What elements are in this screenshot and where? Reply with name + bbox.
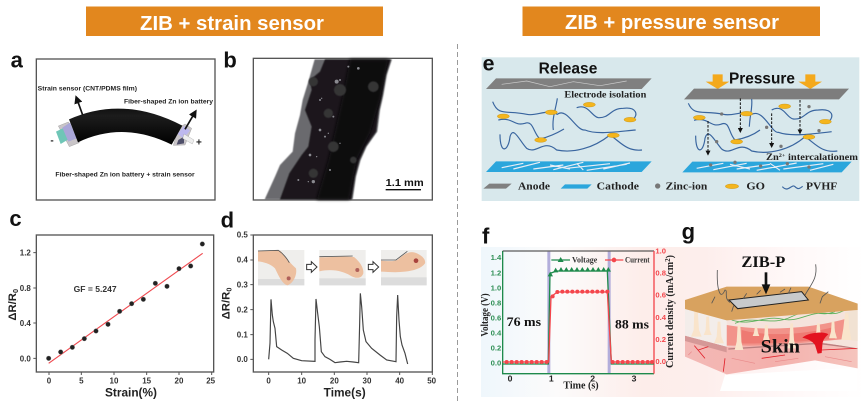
right ticks: 0.0 [655, 357, 666, 366]
sensor patch [729, 292, 808, 309]
label: 76 ms: 76 ms [507, 314, 541, 329]
panel b: fiber micrograph: b [223, 48, 237, 73]
axes [503, 251, 654, 374]
data points [46, 242, 205, 361]
tick labels: 1.2 [20, 249, 31, 258]
blood vessel [802, 333, 828, 354]
y axis title: ΔR/R [220, 292, 232, 319]
left ticks: 1.0 [491, 284, 501, 293]
tick labels: 50 [427, 377, 437, 386]
panel g: skin illustration [682, 219, 858, 391]
label: Zn intercalation: intercalationem [785, 152, 859, 162]
lower skin layer [685, 336, 858, 374]
left ticks: 0.4 [491, 329, 502, 338]
x ticks: 1 [549, 374, 554, 384]
legend: Anode [518, 181, 551, 192]
tick labels [20, 249, 216, 386]
left ticks: 1.4 [491, 253, 502, 262]
tick labels: 0 [47, 377, 52, 386]
label: pressure: Pressure [729, 71, 795, 88]
label: strain sensor: Strain sensor (CNT/PDMS film) [38, 86, 137, 93]
label: Zn intercalation: 2+ [779, 153, 785, 159]
tick labels: 0.2 [237, 305, 248, 314]
tick labels: 0.1 [237, 330, 248, 339]
label: electrode isolation: Electrode isolation [564, 89, 646, 99]
response curve [269, 293, 408, 364]
legend: Current [625, 256, 650, 265]
label: plus: + [196, 137, 202, 148]
tick labels: 0 [266, 377, 271, 386]
label: Skin: Skin [761, 337, 800, 358]
legend [551, 256, 650, 265]
arrow: to battery [185, 112, 195, 129]
label: Zn intercalation: Zn [766, 152, 777, 162]
ion path arrows [708, 98, 800, 154]
photo: fiber [265, 59, 392, 199]
x ticks: 0 [508, 374, 513, 384]
legend: PVHF [806, 181, 837, 192]
x axis title: time: Time (s) [563, 381, 599, 392]
panel a: strain sensor schematic: a [11, 48, 24, 73]
tick labels: 0.8 [20, 284, 31, 293]
polymer chains: release [493, 98, 642, 151]
x axis title: Time(s) [324, 387, 366, 400]
right ticks [655, 246, 667, 366]
anode: pressure [684, 89, 849, 99]
right ticks: 0.4 [655, 313, 667, 322]
tick labels: 20 [330, 377, 339, 386]
wires and hairs [712, 264, 828, 312]
tick labels [237, 231, 437, 386]
left ticks [491, 253, 502, 367]
voltage trace [503, 267, 654, 364]
tick labels: 0.4 [20, 319, 31, 328]
left ticks: 0.8 [491, 299, 502, 308]
right ticks: 0.6 [655, 291, 666, 300]
panel f: voltage and current chart [480, 224, 667, 392]
arrow: step one [307, 262, 317, 272]
white cut-out base [720, 368, 857, 391]
x ticks: 3 [632, 374, 637, 384]
right ticks: 0.8 [655, 268, 667, 277]
axis ticks [250, 235, 432, 375]
middle fat layer [685, 309, 858, 350]
tick labels: 15 [142, 377, 152, 386]
panel c: strain scatter chart: c [9, 206, 22, 231]
right ticks: 0.2 [655, 335, 666, 344]
icon: fiber battery and sensor tube [56, 109, 194, 147]
y axis title: current density: ) [665, 255, 676, 258]
label: ZIB-P: ZIB-P [741, 254, 786, 271]
left ticks: 0.2 [491, 344, 501, 353]
panel d: wrist bending response chart [220, 208, 437, 400]
switching bands [547, 252, 611, 373]
panel g: skin illustration: g [682, 219, 695, 244]
left ticks: 1.2 [491, 268, 501, 277]
x ticks [508, 374, 637, 384]
tick labels: 0.5 [237, 231, 248, 240]
tick labels: 10 [110, 377, 119, 386]
polymer chains: pressure [688, 99, 837, 152]
label: 88 ms: 88 ms [615, 316, 649, 331]
left ticks: 0.0 [491, 358, 501, 367]
tick labels: 0.3 [237, 280, 248, 289]
heading: ZIB + pressure sensor: ZIB + pressure sensor [565, 11, 779, 34]
zinc ions [715, 105, 821, 148]
label: battery: Fiber-shaped Zn ion battery [124, 99, 213, 106]
y axis title: current density: 2 [664, 258, 672, 262]
arrow: to strain sensor [77, 98, 83, 115]
panel b: fiber micrograph [223, 48, 432, 200]
right ticks: 1.0 [655, 246, 666, 255]
tick labels: 5 [79, 377, 84, 386]
legend: Zinc-ion [666, 181, 708, 192]
tick labels: 0.4 [237, 256, 248, 265]
axis ticks [33, 253, 212, 375]
panel c: strain scatter chart [7, 206, 216, 400]
tick labels: 0.0 [20, 354, 31, 363]
tick labels: 40 [395, 377, 405, 386]
arrow: to patch [762, 272, 770, 294]
panel e: release and pressure mechanism: e [483, 51, 495, 75]
anode: release [486, 78, 652, 89]
y axis title: current density: Current density (mA/cm [665, 258, 676, 368]
x axis title: Strain(%) [105, 387, 157, 400]
tick labels: 25 [206, 377, 216, 386]
x ticks: 2 [590, 374, 595, 384]
label: release: Release [539, 61, 597, 78]
tick labels: 0.0 [237, 355, 248, 364]
photo: wrist level [319, 250, 366, 285]
y axis title: 0 [11, 289, 20, 293]
current trace [503, 290, 654, 364]
tick labels: 10 [297, 377, 307, 386]
legend: GO [746, 181, 765, 192]
label: minus: - [50, 136, 54, 147]
scale bar: 1.1 mm: 1.1 mm [386, 178, 424, 189]
pressure arrows [706, 74, 822, 89]
panel a: strain sensor schematic [11, 48, 215, 200]
label: gauge factor: GF = 5.247 [74, 284, 117, 294]
caption: Fiber-shaped Zn ion battery + strain sensor [55, 172, 195, 179]
tick labels: 20 [175, 377, 184, 386]
heading: ZIB + strain sensor: ZIB + strain sensor [140, 12, 324, 35]
panel d: wrist bending response chart: d [221, 208, 234, 233]
panel e: release and pressure mechanism [482, 51, 859, 201]
legend: Voltage [572, 256, 598, 265]
panel f: voltage and current chart: f [482, 224, 490, 249]
tick labels: 30 [363, 377, 372, 386]
GO flakes: pressure [693, 104, 831, 144]
arrow: step two [368, 262, 379, 272]
legend: Cathode [597, 181, 640, 192]
green nerve network [732, 309, 848, 323]
photo: wrist bent up [381, 250, 427, 285]
y axis title: 0 [224, 288, 233, 292]
background band for f and g [481, 247, 865, 397]
heading: ZIB + strain sensor [86, 6, 383, 36]
cathode: release [486, 161, 652, 172]
legend [483, 181, 837, 192]
y axis title: ΔR/R [7, 293, 19, 321]
photo: wrist bent down [258, 250, 304, 285]
fit line [49, 253, 203, 363]
top skin layer [685, 287, 858, 320]
y axis title: voltage: Voltage (V) [480, 293, 491, 337]
GO flakes: release [497, 102, 636, 142]
cathode: pressure [682, 161, 852, 172]
left ticks: 0.6 [491, 314, 501, 323]
heading: ZIB + pressure sensor [522, 6, 820, 36]
